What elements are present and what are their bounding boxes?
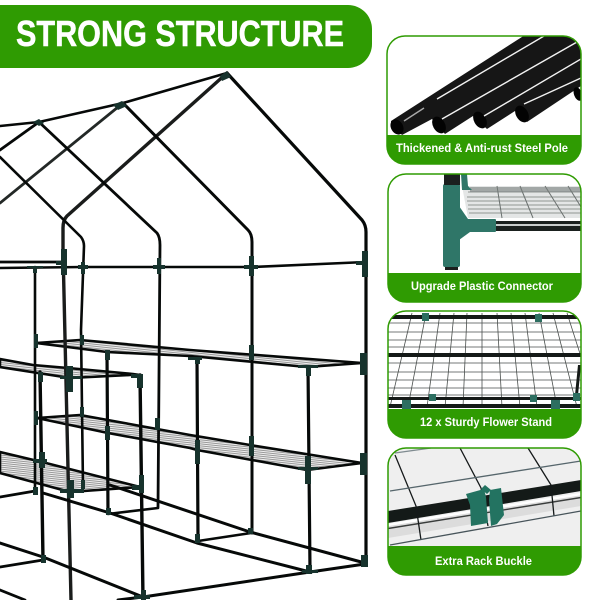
caption text: Thickened & Anti-rust Steel Pole (396, 143, 568, 155)
wire mesh (388, 312, 580, 404)
horizontal black tube (494, 221, 581, 231)
caption band (388, 409, 581, 438)
caption text: Extra Rack Buckle (435, 556, 532, 568)
pole shadow (388, 495, 581, 538)
title banner (0, 5, 372, 68)
caption text: Upgrade Plastic Connector (411, 281, 553, 293)
panel: plastic connector (388, 174, 581, 302)
caption band (388, 273, 581, 302)
connectors (27, 71, 368, 600)
caption text: 12 x Sturdy Flower Stand (420, 417, 552, 429)
posts and ground rails (0, 352, 365, 600)
title text: STRONG STRUCTURE (16, 13, 344, 54)
caption band (388, 546, 581, 575)
wires (390, 448, 581, 545)
caption band (387, 135, 581, 164)
icon: green buckle (466, 485, 504, 526)
icon: black steel poles (388, 35, 584, 137)
roof and arches (0, 73, 366, 600)
greenhouse frame illustration (0, 71, 368, 600)
wire shelf (462, 186, 581, 218)
shelves (0, 340, 362, 492)
clips (402, 313, 580, 409)
icon: green connector (443, 174, 496, 267)
panel: flower stand (388, 311, 597, 438)
rails (388, 315, 581, 408)
panel: thickened steel pole (387, 35, 584, 164)
black tube (388, 480, 581, 523)
panel: rack buckle (388, 448, 581, 575)
